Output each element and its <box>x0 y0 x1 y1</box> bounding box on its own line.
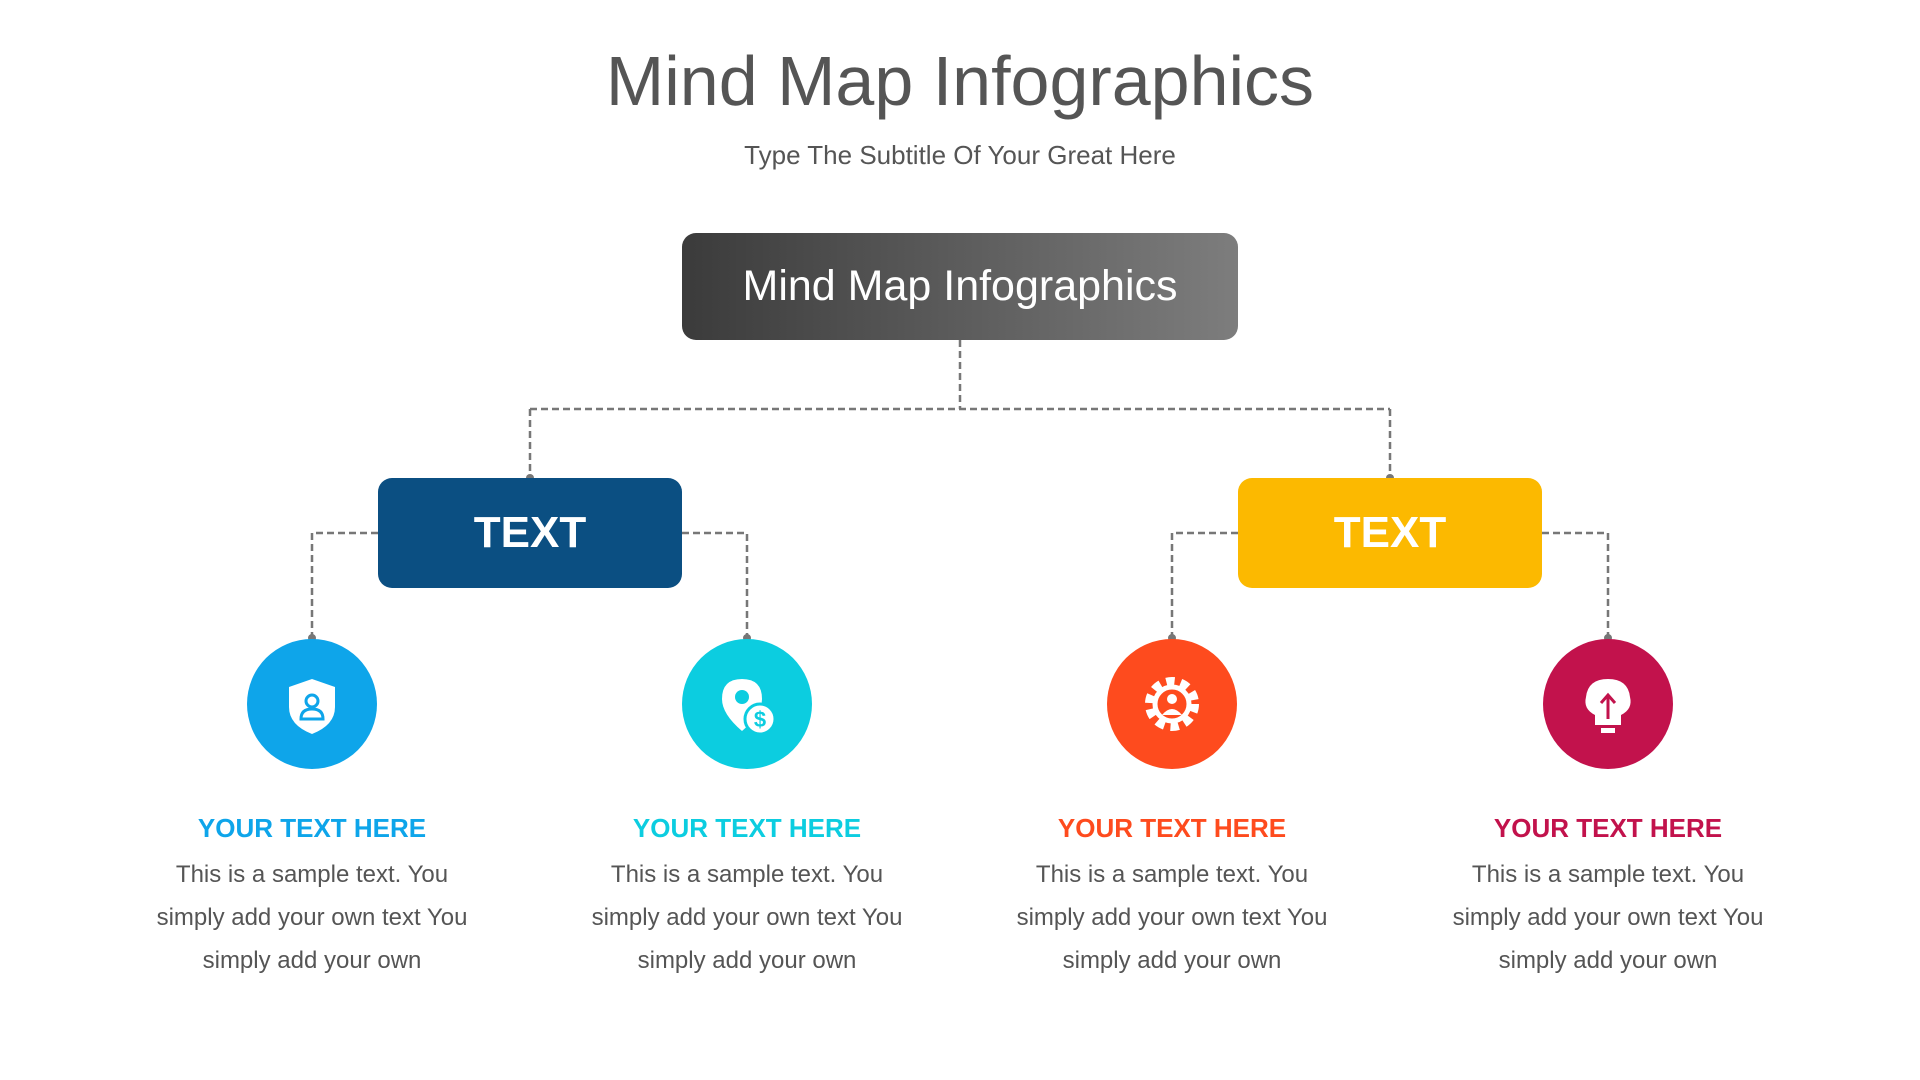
column 2 text: YOUR TEXT HERE <box>633 813 861 843</box>
main box: Mind Map Infographics <box>742 262 1178 310</box>
title: Mind Map Infographics <box>606 42 1314 120</box>
column 2 text <box>592 813 902 974</box>
column 4 text: YOUR TEXT HERE <box>1494 813 1722 843</box>
column 1 text: This is a sample text. You <box>176 861 448 888</box>
icon: location dollar <box>682 639 812 769</box>
column 3 text: simply add your own text You <box>1017 904 1327 931</box>
icon: gear <box>1107 639 1237 769</box>
icon: location dollar: $ <box>754 707 766 732</box>
main box <box>682 233 1238 340</box>
column 3 text: This is a sample text. You <box>1036 861 1308 888</box>
icon: shield <box>247 639 377 769</box>
column 2 text: simply add your own <box>638 947 856 974</box>
box: right TEXT: TEXT <box>1334 508 1446 557</box>
column 1 text: simply add your own <box>203 947 421 974</box>
column 1 text: YOUR TEXT HERE <box>198 813 426 843</box>
column 2 text: simply add your own text You <box>592 904 902 931</box>
icon: brain <box>1543 639 1673 769</box>
box: left TEXT <box>378 478 682 588</box>
column 4 text: This is a sample text. You <box>1472 861 1744 888</box>
subtitle: Type The Subtitle Of Your Great Here <box>744 140 1176 170</box>
column 4 text: simply add your own <box>1499 947 1717 974</box>
column 2 text: This is a sample text. You <box>611 861 883 888</box>
box: right TEXT <box>1238 478 1542 588</box>
column 1 text <box>157 813 467 974</box>
column 4 text <box>1453 813 1763 974</box>
column 3 text <box>1017 813 1327 974</box>
column 3 text: simply add your own <box>1063 947 1281 974</box>
column 4 text: simply add your own text You <box>1453 904 1763 931</box>
column 3 text: YOUR TEXT HERE <box>1058 813 1286 843</box>
box: left TEXT: TEXT <box>474 508 586 557</box>
column 1 text: simply add your own text You <box>157 904 467 931</box>
